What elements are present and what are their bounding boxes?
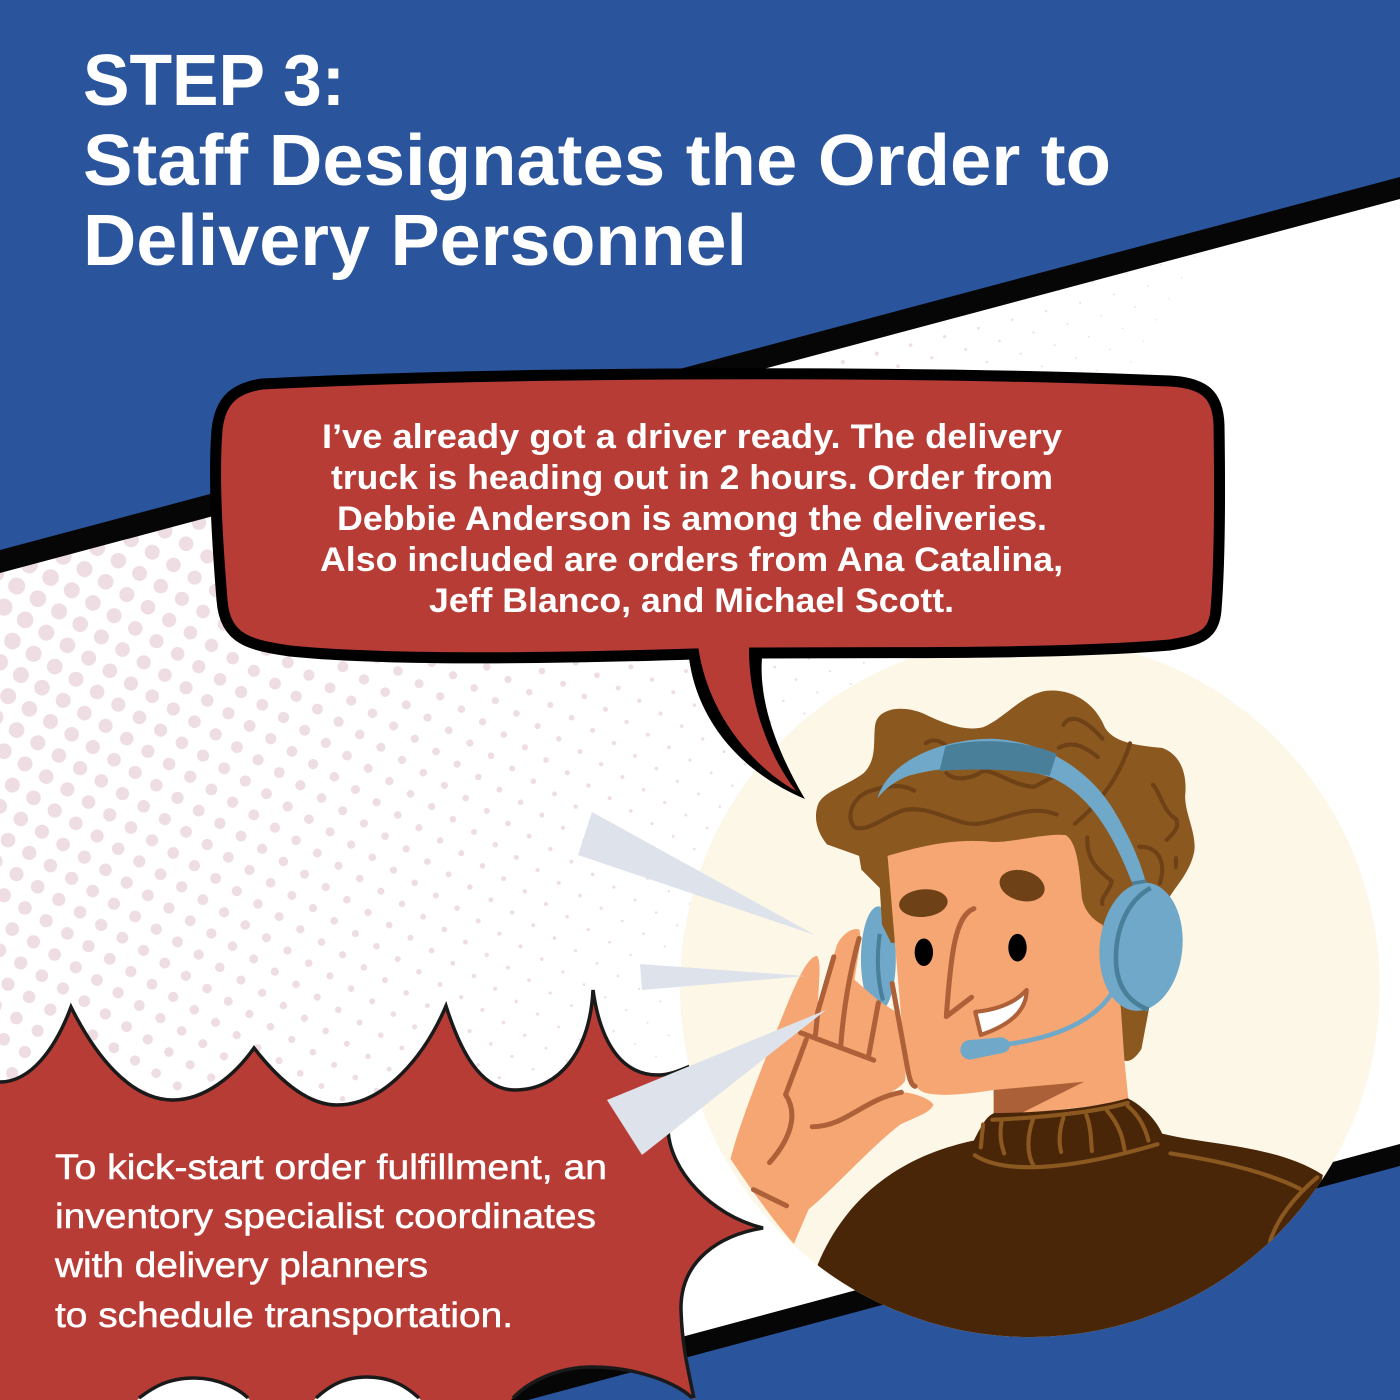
bottom blue panel [528, 1166, 1400, 1400]
speech bubble text: I’ve already got a driver ready. The delivery [322, 418, 1062, 456]
top black diagonal band [0, 167, 1400, 573]
bubble body [216, 374, 1220, 658]
microphone [960, 994, 1112, 1060]
hand [731, 929, 933, 1244]
hand and face lines [753, 909, 974, 1206]
hair curls [850, 719, 1177, 904]
left ear cup [861, 906, 896, 1012]
starburst text: To kick-start order fulfillment, an [55, 1148, 607, 1187]
sweater [818, 1098, 1323, 1338]
right ear cup [1099, 879, 1183, 1012]
mouth [975, 990, 1027, 1035]
starburst text: inventory specialist coordinates [55, 1197, 596, 1236]
top blue panel [0, 0, 1400, 550]
hair [816, 691, 1195, 1061]
speech bubble text [320, 418, 1063, 620]
title: Staff Designates the Order to [83, 121, 1111, 201]
headset band dark segment [939, 741, 1057, 776]
neck shadow [994, 1082, 1084, 1115]
cream circle [680, 637, 1380, 1337]
speech bubble text: truck is heading out in 2 hours. Order from [331, 459, 1053, 497]
speech bubble text: Debbie Anderson is among the deliveries. [337, 500, 1047, 538]
headset band [877, 739, 1146, 883]
speech bubble text: Also included are orders from Ana Catalina, [320, 541, 1063, 579]
bottom black diagonal band [447, 1144, 1400, 1400]
sound cones [578, 812, 826, 1155]
character clipped to circle [731, 691, 1323, 1375]
face and neck [888, 835, 1129, 1118]
title [83, 41, 1111, 281]
speech bubble [216, 374, 1220, 799]
red starburst panel [0, 990, 763, 1400]
title: Delivery Personnel [83, 201, 747, 281]
eyes [915, 934, 1027, 966]
speech bubble text: Jeff Blanco, and Michael Scott. [429, 582, 954, 620]
starburst text: to schedule transportation. [55, 1296, 513, 1335]
cream circle with call-centre character [680, 637, 1380, 1375]
starburst text [54, 1148, 607, 1335]
bubble tail outline [686, 648, 805, 799]
eyebrows [899, 870, 1045, 917]
title: STEP 3: [83, 41, 345, 121]
bubble tail fill [698, 645, 796, 791]
starburst text: with delivery planners [54, 1246, 428, 1285]
sweater details [975, 1103, 1317, 1242]
